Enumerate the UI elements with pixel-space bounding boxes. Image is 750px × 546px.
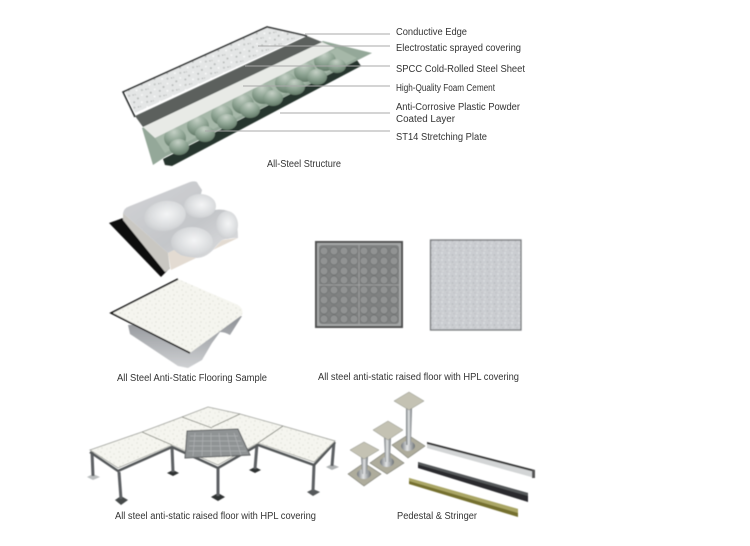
pedestal feet <box>87 464 339 505</box>
domes: rear row <box>164 51 336 148</box>
layer: dark bottom edge <box>163 60 361 166</box>
labels: layer names <box>396 27 525 143</box>
labels: layer names: Electrostatic sprayed covering <box>396 43 521 54</box>
floor panels <box>90 407 335 468</box>
labels: layer names: Coated Layer <box>396 114 456 125</box>
layer: tray inner recess <box>155 48 357 153</box>
medium pedestal <box>370 421 404 474</box>
dome: bump cluster <box>142 194 238 257</box>
caption: HPL covering (bottom): All steel anti-static raised floor with HPL covering <box>115 511 316 522</box>
tall pedestal <box>392 392 425 458</box>
layer: foam cement <box>143 42 335 138</box>
domes: front row <box>169 59 346 155</box>
caption: pedestal and stringer: Pedestal & Stringer <box>397 511 478 522</box>
layer: conductive edge <box>123 27 307 117</box>
cut face <box>168 238 238 270</box>
black panel edge <box>109 218 170 277</box>
shell body <box>123 181 238 258</box>
caption: HPL covering (middle): All steel anti-static raised floor with HPL covering <box>318 372 519 383</box>
image: tile underside with dimples <box>315 241 403 328</box>
black stringer <box>418 462 528 502</box>
labels: layer names: Conductive Edge <box>396 27 467 38</box>
caption: all-steel structure: All-Steel Structure <box>267 159 341 170</box>
diagram: all-steel structure layers <box>123 27 372 166</box>
caption: flooring sample: All Steel Anti-Static Flooring Sample <box>117 373 267 384</box>
side wall <box>123 213 170 272</box>
lifted tile <box>185 429 250 458</box>
labels: layer names: High-Quality Foam Cement <box>396 83 495 94</box>
labels: layer names: ST14 Stretching Plate <box>396 132 487 143</box>
image: pedestals <box>348 392 425 486</box>
layer: stretching plate tray <box>142 41 372 165</box>
underside <box>128 316 242 368</box>
stringer frame <box>90 442 335 471</box>
silver stringer <box>427 442 535 478</box>
image: raised floor assembly <box>87 407 339 505</box>
panel seams <box>142 414 283 445</box>
image: tile HPL top surface <box>430 240 521 330</box>
short pedestal <box>348 442 381 486</box>
dimple grid <box>320 247 398 323</box>
lifted tile grid <box>188 433 246 456</box>
image: stringers <box>409 442 535 517</box>
image: flooring sample covered <box>111 279 242 368</box>
image: flooring sample shell <box>109 181 238 277</box>
labels: layer names: Anti-Corrosive Plastic Powder <box>396 102 521 113</box>
leader lines <box>205 34 390 131</box>
labels: layer names: SPCC Cold-Rolled Steel Sheet <box>396 64 525 75</box>
layer: cold-rolled steel sheet <box>135 36 322 127</box>
top surface <box>111 279 242 353</box>
black edge <box>111 279 190 353</box>
gold stringer <box>409 478 518 517</box>
pedestal legs <box>92 442 334 499</box>
layer: electrostatic sprayed covering <box>125 28 307 113</box>
